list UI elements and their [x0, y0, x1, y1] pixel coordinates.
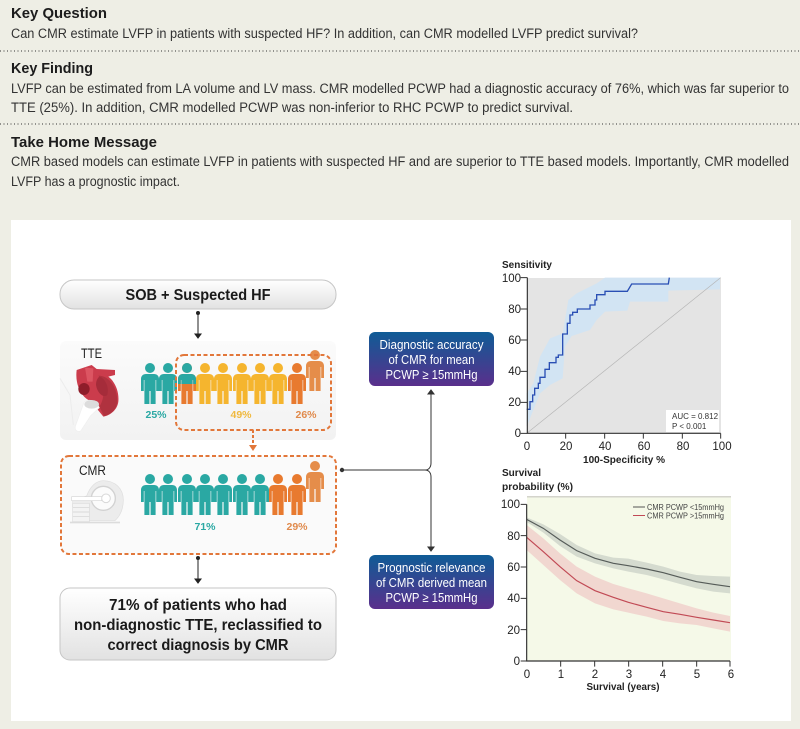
- text block: key finding: Key Finding: [11, 60, 93, 77]
- text block: key question: Key Question: [11, 5, 107, 22]
- legend: [633, 503, 724, 520]
- y axis labels: 100: [501, 499, 520, 511]
- text block: take home message: [11, 134, 789, 189]
- text block: key finding: TTE (25%). In addition, CMR modelled PCWP was non-inferior to RHC PCWP to predict survival.: [11, 100, 573, 115]
- box: result: correct diagnosis by CMR: [108, 637, 289, 654]
- box: prognostic relevance: PCWP ≥ 15mmHg: [386, 590, 478, 605]
- legend: CMR PCWP >15mmHg: [647, 512, 724, 520]
- x axis labels: 100: [712, 441, 732, 453]
- y axis labels: [502, 273, 521, 440]
- y axis labels: 40: [508, 366, 521, 378]
- x axis labels: 2: [592, 669, 598, 681]
- arrow: CMR branching to outcomes: [340, 390, 434, 551]
- box: diagnostic accuracy: [369, 332, 494, 386]
- icon: MRI scanner: [70, 481, 123, 523]
- x axis labels: 20: [560, 441, 572, 453]
- panel: central illustration: [11, 220, 791, 721]
- y axis labels: 20: [507, 625, 520, 637]
- box: prognostic relevance: of CMR derived mean: [376, 575, 487, 590]
- axis title: 100-specificity: 100-Specificity %: [583, 454, 666, 466]
- labels: TTE percentages: 26%: [295, 409, 317, 421]
- y axis labels: 100: [502, 273, 521, 285]
- axis title: survival years: Survival (years): [586, 681, 660, 693]
- box: diagnostic accuracy: Diagnostic accuracy: [380, 337, 484, 352]
- labels: TTE percentages: [145, 409, 317, 421]
- AUC annotation: AUC = 0.812: [672, 412, 719, 421]
- y axis labels: 60: [508, 335, 521, 347]
- axis title: survival probability: [502, 467, 573, 493]
- text block: take home message: LVFP has a prognostic impact.: [11, 174, 180, 189]
- chart: ROC curve: [502, 259, 732, 466]
- axis title: sensitivity: Sensitivity: [502, 259, 552, 271]
- y axis labels: 80: [507, 531, 520, 543]
- panel: CMR: [61, 456, 336, 554]
- y axis labels: 80: [508, 304, 521, 316]
- x axis labels: 80: [677, 441, 689, 453]
- x axis labels: [524, 441, 732, 453]
- x axis labels: 5: [694, 669, 700, 681]
- group: TTE people icons: [141, 350, 324, 404]
- x axis labels: 6: [728, 669, 734, 681]
- labels: TTE percentages: 25%: [145, 409, 167, 421]
- label: CMR: CMR: [79, 463, 106, 478]
- x axis labels: 40: [599, 441, 611, 453]
- y axis labels: 20: [508, 397, 521, 409]
- y axis labels: 60: [507, 562, 520, 574]
- icon: heart with ultrasound probe: [60, 365, 118, 431]
- box: prognostic relevance: Prognostic relevance: [378, 560, 486, 575]
- label: TTE: TTE: [81, 346, 102, 361]
- x axis labels: 1: [558, 669, 564, 681]
- x axis labels: [524, 669, 734, 681]
- AUC annotation: [666, 410, 719, 432]
- axis title: survival probability: probability (%): [502, 481, 573, 493]
- chart: survival curves: [501, 467, 734, 693]
- box: diagnostic accuracy: PCWP ≥ 15mmHg: [386, 367, 478, 382]
- y axis labels: 0: [515, 428, 521, 440]
- box: SOB + suspected HF: SOB + Suspected HF: [126, 287, 271, 304]
- box: diagnostic accuracy: of CMR for mean: [388, 352, 474, 367]
- dashed box: non-diagnostic TTE: [176, 355, 331, 430]
- x axis labels: 60: [638, 441, 650, 453]
- arrow: CMR to result: [195, 556, 201, 583]
- y axis labels: 40: [507, 593, 520, 605]
- labels: TTE percentages: 49%: [230, 409, 252, 421]
- x axis labels: 0: [524, 669, 530, 681]
- AUC annotation: P < 0.001: [672, 422, 707, 431]
- text block: take home message: Take Home Message: [11, 134, 157, 151]
- text block: key question: Can CMR estimate LVFP in patients with suspected HF? In addition, can CMR modelled LVFP predict survival?: [11, 26, 638, 41]
- box: result: non-diagnostic TTE, reclassified to: [74, 617, 322, 634]
- box: result: 71% of patients who had: [109, 597, 287, 614]
- y axis labels: [501, 499, 520, 668]
- arrow: dashed TTE to CMR: [249, 430, 257, 451]
- box: SOB + suspected HF: [60, 280, 336, 309]
- text block: key finding: [11, 60, 789, 115]
- labels: CMR percentages: [194, 521, 308, 533]
- labels: CMR percentages: 29%: [286, 521, 308, 533]
- group: CMR people icons: [141, 461, 324, 515]
- box: result: [60, 588, 336, 660]
- box: prognostic relevance: [369, 555, 494, 609]
- y axis labels: 0: [514, 656, 520, 668]
- legend: CMR PCWP <15mmHg: [647, 503, 724, 512]
- x axis labels: 4: [660, 669, 667, 681]
- text block: key question: [11, 5, 638, 41]
- panel: TTE: [60, 341, 336, 440]
- labels: CMR percentages: 71%: [194, 521, 216, 533]
- arrow: SOB to TTE: [195, 312, 201, 338]
- x axis labels: 3: [626, 669, 632, 681]
- axis title: survival probability: Survival: [502, 467, 541, 479]
- x axis labels: 0: [524, 441, 530, 453]
